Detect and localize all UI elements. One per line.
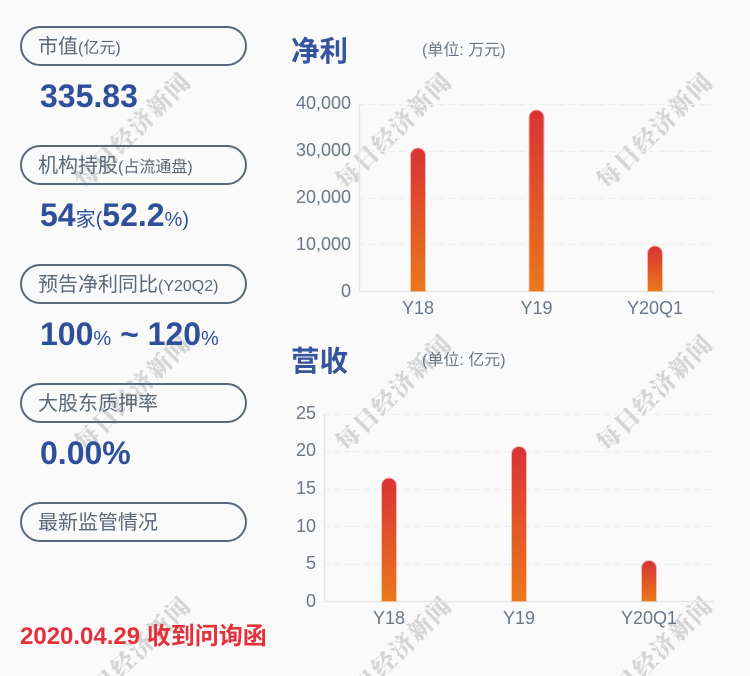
bar chart: revenue: 20	[296, 440, 316, 460]
bar chart: net profit: 20,000	[296, 187, 351, 207]
bar chart: net profit: 0	[341, 281, 351, 301]
bar chart: revenue	[296, 403, 714, 628]
bar chart: net profit: 30,000	[296, 140, 351, 160]
bar chart: revenue: Y18	[373, 608, 405, 628]
metric: forecast net profit	[21, 265, 246, 352]
metric: market value: 市值(亿元)	[38, 35, 121, 58]
bar chart: net profit: 40,000	[296, 93, 351, 113]
bar chart: revenue: 25	[296, 403, 316, 423]
metric: pledge ratio: 0.00%	[40, 435, 131, 471]
bar chart: net profit	[296, 93, 714, 318]
metric: pledge ratio	[21, 384, 246, 471]
metric: institutional holdings	[21, 146, 246, 233]
watermark pattern	[65, 63, 720, 676]
watermark pattern: 每日经济新闻	[326, 325, 459, 458]
callout: inquiry letter date: 2020.04.29 收到问询函	[20, 623, 267, 650]
unit: hundred million yuan: (单位: 亿元)	[422, 351, 506, 369]
metric: market value	[21, 27, 246, 114]
bar chart: revenue: 5	[306, 553, 316, 573]
panel: revenue chart	[291, 346, 714, 628]
bar chart: revenue: 10	[296, 516, 316, 536]
metric: forecast net profit: 100% ~ 120%	[40, 316, 219, 352]
bar chart: net profit: Y18	[402, 298, 434, 318]
metric: latest regulation: 最新监管情况	[38, 511, 158, 534]
watermark pattern: 每日经济新闻	[65, 325, 198, 458]
unit: ten thousand yuan: (单位: 万元)	[422, 41, 506, 59]
bar chart: net profit: Y19	[520, 298, 553, 318]
heading: revenue: 营收	[291, 346, 348, 378]
bar chart: revenue: 0	[306, 591, 316, 611]
panel: key metrics	[20, 27, 267, 650]
metric: latest regulation	[21, 503, 246, 541]
heading: net profit: 净利	[291, 36, 348, 68]
metric: institutional holdings: 54家(52.2%)	[40, 197, 189, 233]
bar chart: revenue: 15	[296, 478, 316, 498]
watermark pattern: 每日经济新闻	[587, 325, 720, 458]
watermark pattern: 每日经济新闻	[587, 63, 720, 196]
bar chart: revenue: Y19	[503, 608, 535, 628]
metric: institutional holdings: 机构持股(占流通盘)	[38, 154, 193, 177]
watermark pattern: 每日经济新闻	[65, 63, 198, 196]
bar chart: net profit: 10,000	[296, 234, 351, 254]
metric: forecast net profit: 预告净利同比(Y20Q2)	[38, 273, 218, 296]
watermark pattern: 每日经济新闻	[326, 63, 459, 196]
metric: pledge ratio: 大股东质押率	[38, 392, 158, 415]
panel: net profit chart	[291, 36, 714, 318]
bar chart: net profit: Y20Q1	[627, 298, 683, 318]
metric: market value: 335.83	[40, 78, 138, 114]
bar chart: revenue: Y20Q1	[621, 608, 677, 628]
